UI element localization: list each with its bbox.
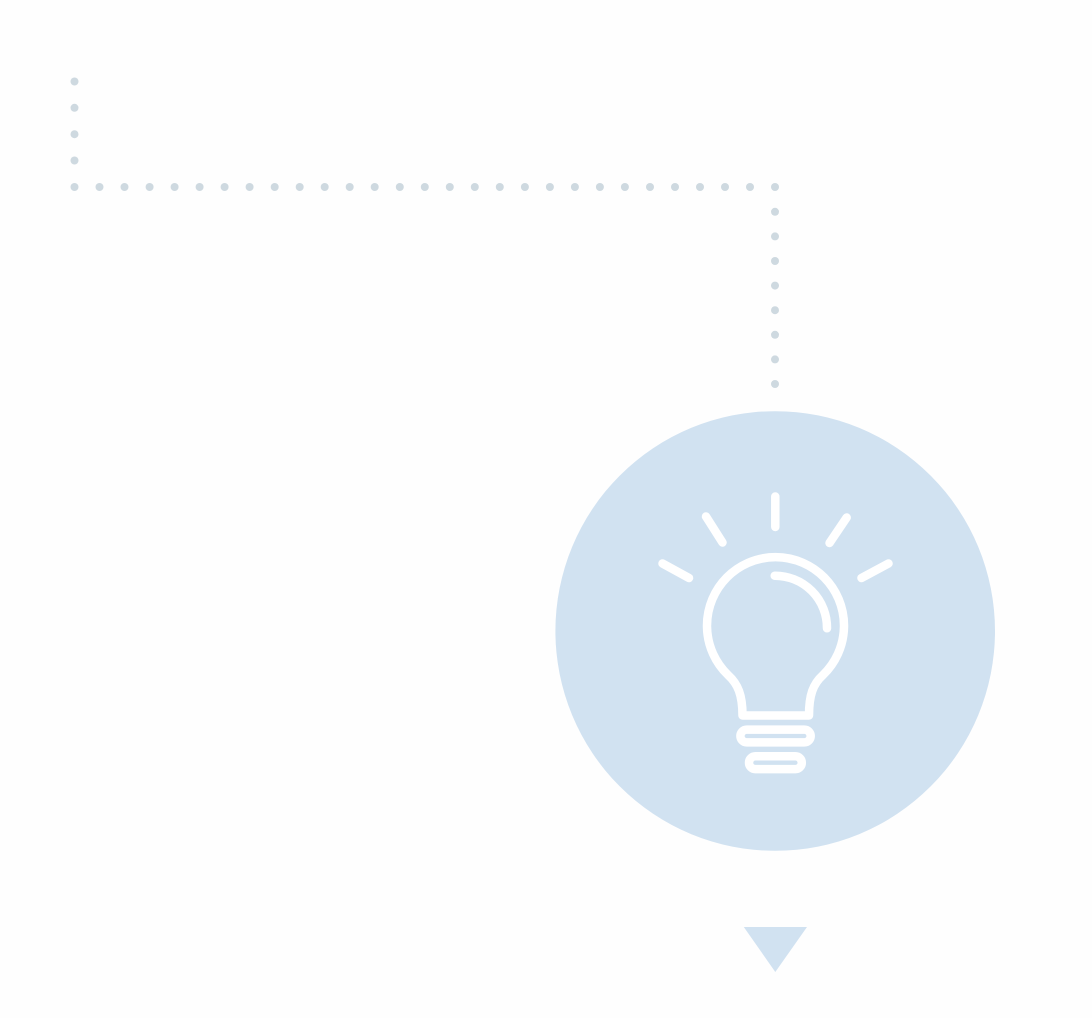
- icon: light rays: [662, 496, 888, 578]
- dotted connector line: [70, 78, 779, 388]
- icon: lower base capsule: [749, 756, 802, 769]
- icon: upper base capsule: [740, 730, 811, 742]
- blue circle: [555, 411, 995, 851]
- icon: light bulb: [662, 496, 888, 769]
- down arrow: [744, 927, 807, 972]
- icon: bulb glass: [707, 557, 844, 716]
- icon: glass highlight: [775, 576, 827, 628]
